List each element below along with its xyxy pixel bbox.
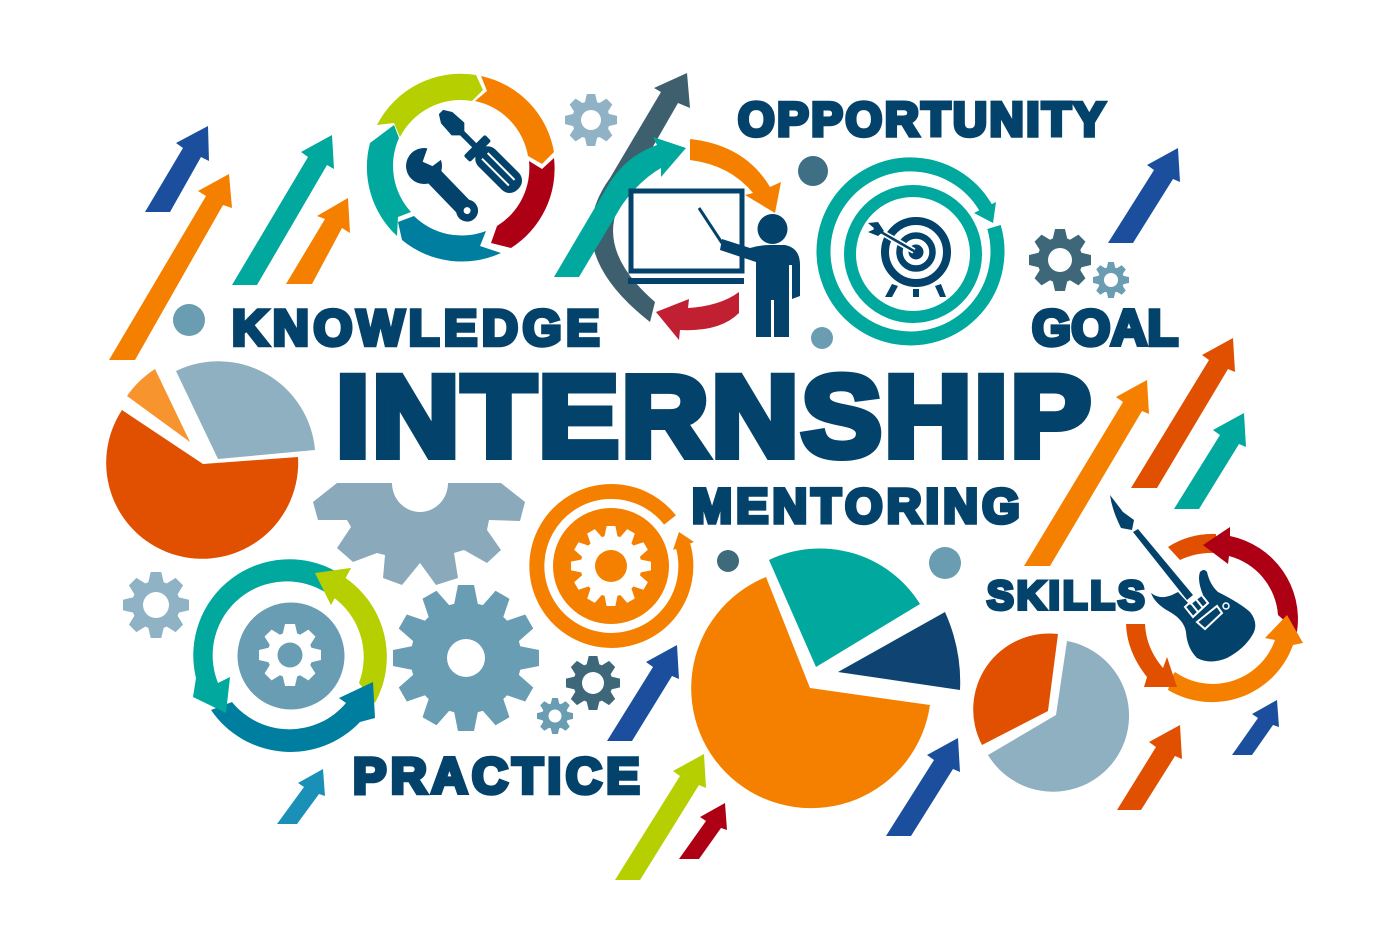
chart: right pie bbox=[973, 633, 1129, 792]
icon: orange gear target bbox=[537, 491, 694, 640]
disc: orange bbox=[553, 508, 669, 624]
gear hub bbox=[278, 642, 302, 668]
chart: left pie bbox=[106, 361, 315, 559]
cycle segment: red bbox=[491, 158, 555, 248]
icon: large gear bbox=[393, 585, 539, 731]
arrow: lime bottom bbox=[615, 754, 706, 880]
icon: presenter figure with pointer bbox=[699, 208, 800, 337]
icon: screwdriver bbox=[430, 101, 529, 200]
title: INTERNSHIP: INTERNSHIP bbox=[336, 352, 1091, 480]
slice: orange bbox=[973, 633, 1058, 745]
heading: KNOWLEDGE: KNOWLEDGE bbox=[232, 300, 600, 356]
arrow: red bottom bbox=[679, 803, 727, 859]
arrow: blue bottom right of pie bbox=[886, 738, 960, 836]
arrow: small cyan bottom left bbox=[277, 769, 325, 824]
cycle segment: lime bbox=[315, 568, 387, 703]
arrow: blue top left bbox=[145, 126, 209, 212]
heading: MENTORING: MENTORING bbox=[692, 480, 1020, 534]
slice: orange bbox=[691, 577, 930, 808]
cycle segment: teal bbox=[367, 125, 411, 236]
gear: white bbox=[259, 624, 321, 686]
arrow: long orange left bbox=[109, 174, 232, 360]
slice: teal bbox=[769, 548, 920, 667]
icon: target cycle bbox=[824, 164, 998, 338]
heading: OPPORTUNITY: OPPORTUNITY bbox=[738, 92, 1105, 146]
arrow: dark orange bottom right bbox=[1117, 725, 1182, 810]
cycle segment: dark orange top bbox=[1168, 534, 1216, 560]
arrow: dark grey curved arrow bbox=[591, 73, 690, 322]
slice: orange bbox=[106, 410, 298, 559]
arrow: orange right bbox=[1024, 380, 1149, 566]
heading: PRACTICE: PRACTICE bbox=[353, 748, 640, 804]
slice: navy bbox=[838, 612, 960, 690]
slice: light orange bbox=[127, 369, 190, 442]
icon: small gear top bbox=[565, 94, 617, 146]
dot bbox=[798, 156, 828, 186]
icon: wrench bbox=[399, 138, 491, 231]
dot bbox=[717, 550, 739, 572]
stand legs bbox=[885, 284, 898, 297]
arrow: orange curved arrow bbox=[690, 139, 781, 213]
icon: gear cycle bottom left bbox=[193, 559, 387, 752]
cycle segment: orange bbox=[475, 76, 554, 164]
gear hub bbox=[595, 550, 627, 582]
chart: large centre pie bbox=[691, 548, 960, 808]
arrow: small blue far right bbox=[1232, 700, 1279, 755]
arrow head: teal bbox=[974, 202, 996, 223]
cycle segment: red bbox=[1203, 527, 1298, 632]
ring: orange bbox=[537, 491, 686, 640]
icon: bullseye bbox=[868, 221, 947, 297]
icon: half gear bbox=[313, 483, 525, 585]
cycle segment: blue bbox=[211, 682, 375, 752]
ring: inner teal bbox=[850, 191, 976, 317]
cycle segment: blue bbox=[398, 216, 501, 262]
icon: tools cycle bbox=[367, 74, 555, 262]
icon: small gear top right bbox=[1093, 262, 1129, 298]
icon: gear top right bbox=[1029, 229, 1091, 291]
arrow: small orange top left bbox=[286, 198, 350, 284]
slice: grey blue bbox=[176, 361, 315, 459]
slice: grey blue bbox=[988, 641, 1129, 792]
arrow: dark orange right bbox=[1131, 338, 1235, 488]
arrow: blue bottom centre bbox=[607, 645, 679, 741]
arrow head: orange bbox=[673, 532, 694, 550]
arrow head: lime bbox=[315, 568, 351, 605]
arrow: blue top right bbox=[1108, 148, 1180, 243]
arrow: teal curved arrow bbox=[554, 137, 686, 277]
dot bbox=[929, 547, 961, 579]
dot bbox=[173, 304, 205, 336]
icon: left small gear bbox=[123, 572, 189, 638]
gear: white bbox=[571, 526, 651, 606]
arrow: teal top left bbox=[232, 135, 334, 285]
cycle segment: lime bbox=[377, 74, 483, 137]
icon: small dark gear bbox=[566, 656, 620, 710]
icon: presentation board bbox=[628, 191, 744, 284]
heading: GOAL: GOAL bbox=[1032, 300, 1178, 356]
heading: SKILLS: SKILLS bbox=[987, 574, 1144, 618]
ring: outer teal bbox=[824, 164, 998, 338]
icon: electric guitar bbox=[1110, 495, 1255, 662]
icon: guitar cycle bbox=[1110, 495, 1303, 702]
disc: blue grey bbox=[238, 602, 344, 710]
cycle segment: dark orange left bbox=[1126, 624, 1177, 687]
arrow: teal right bbox=[1174, 413, 1246, 509]
icon: tiny gear bbox=[537, 698, 573, 734]
dot bbox=[811, 327, 833, 349]
cycle segment: teal bbox=[193, 559, 337, 713]
arrow: red curved arrow bbox=[656, 292, 739, 340]
cycle segment: orange bbox=[1168, 615, 1303, 702]
